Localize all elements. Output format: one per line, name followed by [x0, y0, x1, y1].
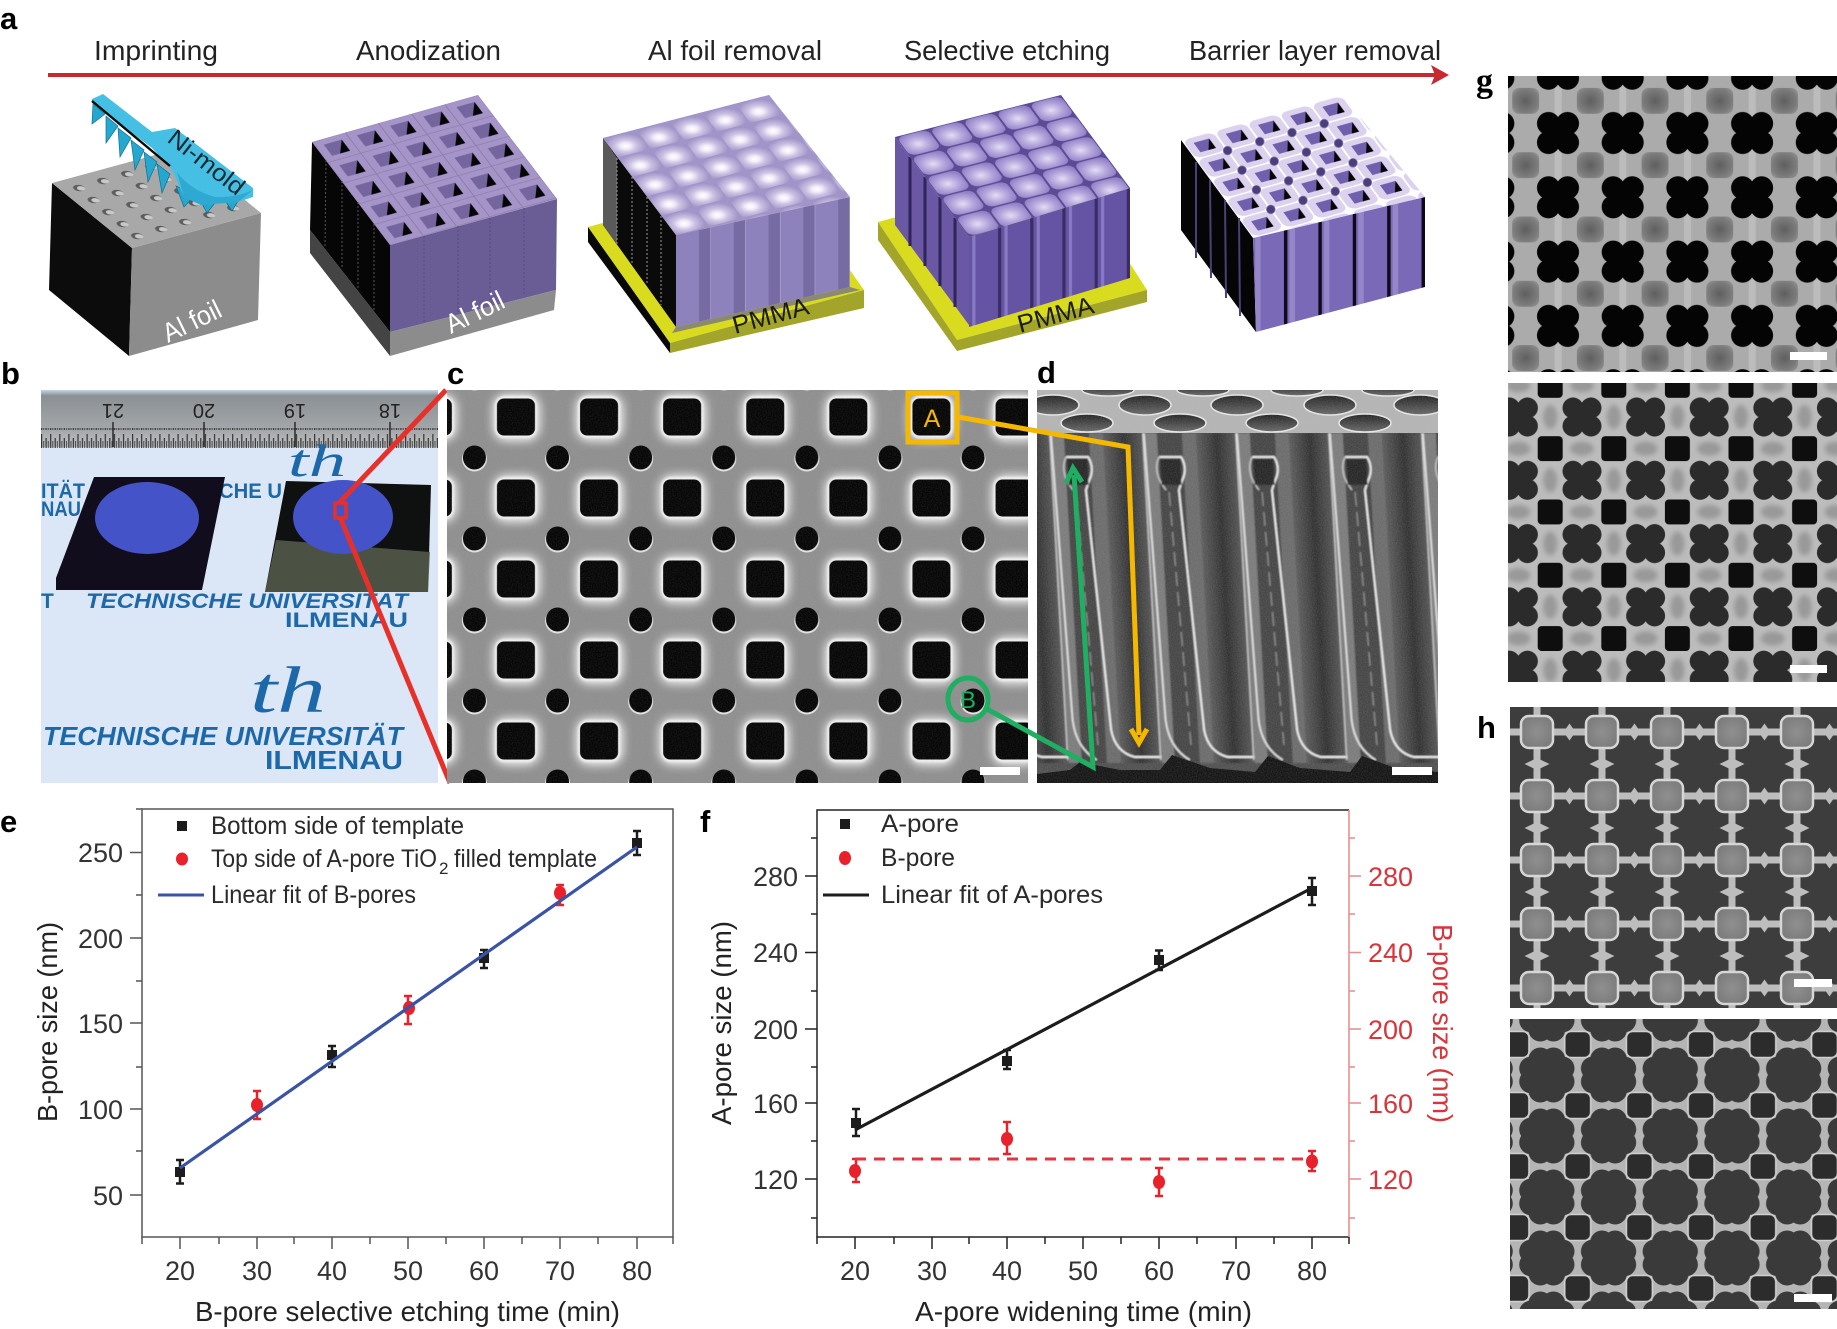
scale bar: [1790, 665, 1827, 673]
logo text top: th: [288, 435, 346, 486]
university name text printed on paper: T: [41, 590, 54, 613]
legend: Top side of A-pore TiO: [211, 845, 437, 873]
scale bar: [1794, 979, 1832, 987]
label: PMMA (cube 3): PMMA: [729, 292, 812, 340]
legend: Linear fit of B-pores: [211, 881, 416, 909]
pore B marker: [948, 678, 988, 720]
legend: Linear fit of A-pores: [881, 881, 1103, 909]
university name text printed on paper: ILMENAU: [265, 745, 403, 775]
x tick labels: 40: [992, 1256, 1022, 1286]
x tick labels: 60: [469, 1256, 499, 1286]
ruler: 20: [193, 399, 215, 421]
arrow: process direction: [48, 65, 1449, 85]
x tick labels: 30: [917, 1256, 947, 1286]
ruler: 21: [102, 399, 124, 421]
scale bar: [1790, 352, 1827, 360]
left y axis title: A-pore size (nm): [706, 921, 737, 1125]
A-pore data points with error bars: [851, 878, 1317, 1136]
x tick labels: 60: [1144, 1256, 1174, 1286]
scale bar: [1794, 1294, 1832, 1302]
x tick labels: 50: [393, 1256, 423, 1286]
pore A marker: A: [924, 405, 941, 433]
step heading: Selective etching: Selective etching: [904, 35, 1110, 66]
x tick labels: 20: [165, 1256, 195, 1286]
legend: [823, 810, 1103, 909]
left y tick labels: 240: [753, 938, 798, 968]
panel label h: h: [1477, 710, 1496, 745]
panel label f: f: [700, 804, 711, 839]
left y tick labels: 120: [753, 1165, 798, 1195]
right y axis title: B-pore size (nm): [1427, 924, 1458, 1123]
step heading: Anodization: Anodization: [356, 35, 501, 66]
illustration: barrier layer removal cube: [1181, 95, 1425, 332]
legend: 2: [439, 859, 448, 878]
label: Ni-mold: Ni-mold: [162, 124, 250, 201]
y tick labels: 100: [78, 1095, 123, 1125]
x tick labels: 30: [242, 1256, 272, 1286]
left y tick labels: 200: [753, 1015, 798, 1045]
right y tick labels: 200: [1368, 1015, 1413, 1045]
left sample: [56, 477, 225, 590]
university name text printed on paper: TECHNISCHE UNIVERSITÄT: [86, 590, 410, 613]
scale bar: [1392, 767, 1432, 775]
step heading: Al foil removal: Al foil removal: [648, 35, 822, 66]
university name text printed on paper: ILMENAU: [285, 609, 408, 632]
y tick labels: 250: [78, 838, 123, 868]
SEM image h top: [1510, 707, 1837, 1008]
callout: A-pore leader arrow (yellow): [958, 417, 1147, 743]
scale bar: [980, 767, 1020, 775]
label: Al foil (cube 2): Al foil: [440, 285, 509, 339]
legend: filled template: [454, 845, 597, 873]
right y tick labels: 240: [1368, 938, 1413, 968]
panel label d: d: [1037, 355, 1056, 390]
callout: B-pore leader arrow (green): [987, 468, 1093, 767]
step heading: Barrier layer removal: Barrier layer removal: [1189, 35, 1441, 66]
zoom lines and sample marker: [335, 390, 450, 783]
SEM image g top: [1508, 76, 1837, 372]
step heading: Imprinting: Imprinting: [94, 35, 218, 66]
panel d: cross-section SEM: [1037, 361, 1438, 783]
illustration: imprinting cube and Ni mold: [49, 94, 261, 356]
left y tick labels: 160: [753, 1089, 798, 1119]
x tick labels: [840, 1256, 1327, 1286]
right y tick labels: 120: [1368, 1165, 1413, 1195]
black data points with error bars: [175, 831, 642, 1184]
x tick labels: 80: [1297, 1256, 1327, 1286]
panel b: photograph of samples: [1, 356, 450, 783]
pore B marker: B: [960, 687, 976, 714]
x tick labels: 70: [1221, 1256, 1251, 1286]
y axis title: B-pore size (nm): [32, 922, 63, 1122]
axes frame and ticks: [130, 809, 673, 1249]
x tick labels: 50: [1068, 1256, 1098, 1286]
y tick labels: 200: [78, 924, 123, 954]
illustration: anodization cube: [310, 95, 557, 356]
legend: B-pore: [881, 844, 955, 872]
x axis title: A-pore widening time (min): [915, 1296, 1252, 1327]
x tick labels: 20: [840, 1256, 870, 1286]
x tick labels: 80: [622, 1256, 652, 1286]
logo text bottom: th: [250, 654, 326, 727]
A-pore linear fit line: [855, 888, 1312, 1130]
panel g: SEM pair: [1476, 63, 1837, 682]
y tick labels: 50: [93, 1181, 123, 1211]
right y tick labels: 280: [1368, 862, 1413, 892]
SEM image: [447, 390, 1028, 783]
SEM image h bottom: [1510, 1019, 1837, 1309]
legend: A-pore: [881, 810, 959, 838]
right y tick labels: 160: [1368, 1089, 1413, 1119]
illustration: Al foil removal cube on PMMA: [588, 95, 864, 353]
label: PMMA (cube 4): PMMA: [1014, 291, 1097, 339]
panel label c: c: [447, 356, 464, 391]
B-pore data points with error bars: [849, 1122, 1318, 1196]
y tick labels: 150: [78, 1009, 123, 1039]
ruler: [41, 390, 438, 448]
x axis title: B-pore selective etching time (min): [195, 1296, 620, 1327]
university name text printed on paper: CHE U: [219, 480, 282, 503]
university name text printed on paper: TECHNISCHE UNIVERSITÄT: [43, 721, 405, 751]
university name text printed on paper: ITÄT: [41, 480, 85, 503]
panel e: B-pore size chart: [0, 804, 673, 1327]
right sample: [265, 480, 431, 592]
x tick labels: 70: [545, 1256, 575, 1286]
SEM image: [1037, 390, 1438, 783]
SEM image g bottom: [1508, 383, 1837, 682]
x tick labels: 40: [317, 1256, 347, 1286]
label: Al foil (cube 1): Al foil: [157, 294, 226, 348]
B-pore dashed fit line: [855, 1158, 1312, 1160]
panel c: top-view SEM: [447, 356, 1028, 783]
left y tick labels: [753, 862, 798, 1195]
legend: Bottom side of template: [211, 812, 464, 840]
panel label e: e: [0, 804, 17, 839]
panel label b: b: [1, 356, 20, 391]
y tick labels: [78, 838, 123, 1211]
panel h: SEM pair: [1477, 707, 1837, 1309]
illustration: selective etching cube on PMMA: [878, 95, 1147, 351]
linear fit line: [180, 847, 637, 1168]
university name text printed on paper: NAU: [41, 498, 81, 521]
x tick labels: [165, 1256, 652, 1286]
university name text printed on paper: [41, 480, 410, 775]
pore A marker: [908, 393, 957, 442]
red data points with error bars: [251, 885, 566, 1119]
right axis: [1349, 810, 1361, 1237]
panel a: fabrication process: [0, 1, 1449, 356]
axes frame and ticks: [805, 810, 1349, 1249]
right y tick labels: [1368, 862, 1413, 1195]
left y tick labels: 280: [753, 862, 798, 892]
ruler: 18: [379, 399, 401, 421]
ruler: 19: [284, 399, 306, 421]
panel f: A-pore and B-pore size chart: [700, 804, 1458, 1327]
legend: [158, 812, 597, 909]
panel label g: g: [1476, 63, 1493, 100]
photo background: [41, 390, 438, 783]
panel label a: a: [0, 1, 18, 36]
